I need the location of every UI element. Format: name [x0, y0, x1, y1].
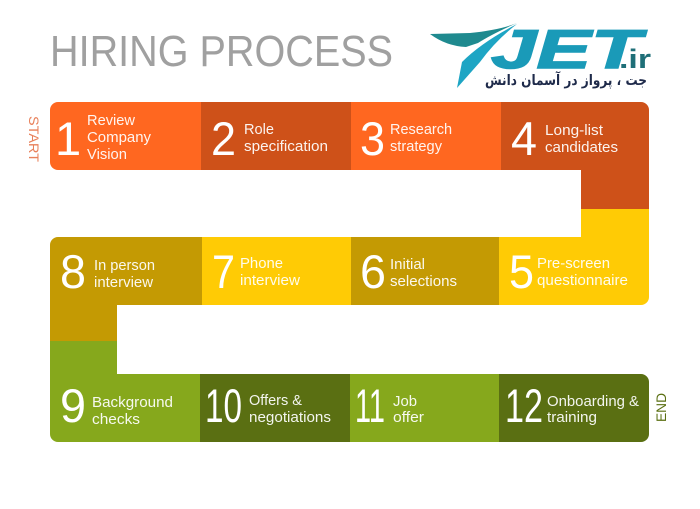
step 4 with connector: [501, 102, 649, 209]
step 2: Role: [244, 121, 274, 138]
step 5 with connector: Pre-screen: [537, 255, 610, 272]
step 2: 2: [211, 112, 236, 165]
step 12: [499, 374, 649, 442]
step 8 with connector: 8: [60, 245, 86, 298]
step 8 with connector: [50, 237, 202, 341]
step 11: Job: [393, 393, 417, 410]
step 7: Phone: [240, 255, 283, 272]
logo: JET.ir: [430, 18, 652, 89]
step 3: [351, 102, 501, 170]
step 1: 1: [55, 112, 81, 165]
step 4 with connector: Long-list: [545, 122, 604, 139]
step 10: negotiations: [249, 409, 331, 426]
step 2: [201, 102, 351, 170]
step 1: Company: [87, 129, 151, 146]
step 3: strategy: [390, 138, 442, 155]
step 1: Review: [87, 112, 135, 129]
step 8 with connector: In person: [94, 257, 155, 274]
step 8 with connector: interview: [94, 274, 153, 291]
step 1: [50, 102, 201, 170]
step 1: Vision: [87, 146, 127, 163]
step 11: [350, 374, 499, 442]
step 11: 11: [355, 379, 385, 432]
step 10: 10: [205, 379, 242, 432]
step 5 with connector: [499, 209, 649, 305]
step 12: 12: [505, 379, 543, 432]
icon: dark teal wing: [430, 23, 517, 47]
step 7: 7: [212, 245, 235, 298]
logo wordmark: JET: [491, 18, 648, 80]
step 9 with connector: 9: [60, 379, 86, 432]
step 3: Research: [390, 121, 452, 138]
end label: END: [653, 393, 669, 422]
step 6: 6: [360, 245, 386, 298]
step 5 with connector: questionnaire: [537, 272, 628, 289]
step 7: interview: [240, 272, 300, 289]
title: HIRING PROCESS: [50, 27, 393, 76]
step 4 with connector: candidates: [545, 139, 618, 156]
step 2: specification: [244, 138, 328, 155]
step 6: [351, 237, 499, 305]
step 6: Initial: [390, 256, 425, 273]
step 12: Onboarding &: [547, 393, 639, 410]
logo domain: .ir: [619, 44, 652, 74]
icon: light blue wing: [457, 24, 517, 88]
step 12: training: [547, 409, 597, 426]
step 9 with connector: checks: [92, 411, 140, 428]
step 9 with connector: [50, 341, 200, 442]
step 10: [200, 374, 350, 442]
step 3: 3: [360, 112, 385, 165]
step 4 with connector: 4: [511, 112, 537, 165]
step 10: Offers &: [249, 392, 302, 409]
logo tagline: جت ، پرواز در آسمان دانش: [485, 71, 647, 89]
step 5 with connector: 5: [509, 245, 534, 298]
step 7: [202, 237, 351, 305]
step 11: offer: [393, 409, 424, 426]
start label: START: [26, 116, 42, 162]
step 6: selections: [390, 273, 457, 290]
step 9 with connector: Background: [92, 394, 173, 411]
